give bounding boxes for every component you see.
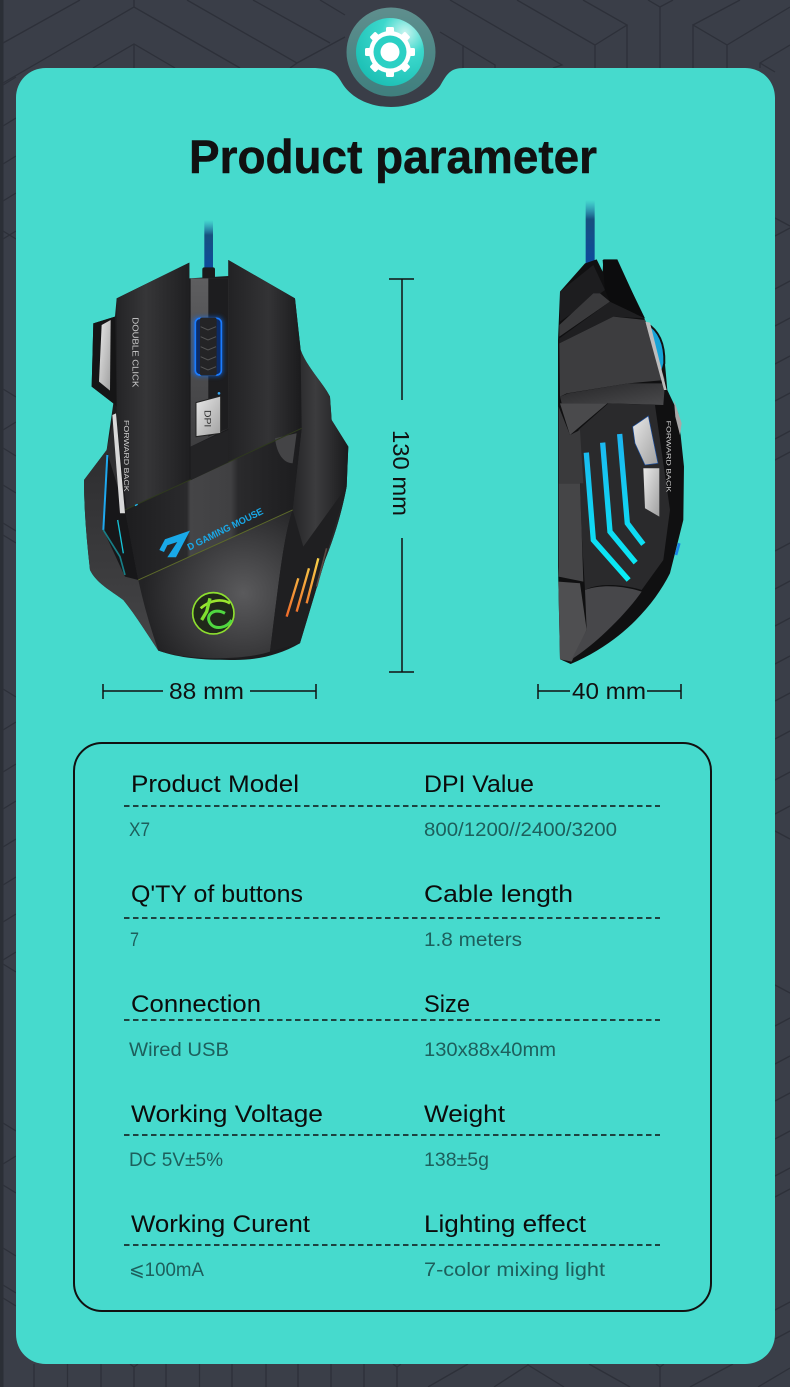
top shell [117, 263, 189, 510]
mouse body [84, 260, 348, 660]
spec: cable length: Cable length [424, 881, 573, 908]
spec: product model: Product Model [131, 771, 299, 798]
spec: cable length [424, 881, 573, 951]
spec: working voltage [129, 1101, 323, 1171]
spec: dpi value: 800/1200//2400/3200 [424, 819, 617, 841]
spec: working current [129, 1211, 310, 1281]
spec: size [424, 991, 556, 1061]
spec: dpi value [424, 771, 617, 841]
top side button [674, 400, 682, 435]
spec: weight: 138±5g [424, 1149, 489, 1171]
mouse cable [202, 220, 215, 279]
palm rest [138, 510, 293, 658]
dimension: depth 40 mm [538, 678, 681, 704]
diagonal band [125, 428, 302, 580]
spec: weight [424, 1101, 505, 1171]
rear light [676, 543, 679, 555]
lower right edge [270, 487, 347, 652]
left light strips [103, 455, 125, 575]
side buttons [112, 413, 129, 513]
side buttons: FORWARD BACK [122, 420, 129, 492]
spec: connection: Connection [131, 991, 261, 1018]
spec: lighting effect: 7-color mixing light [424, 1259, 606, 1281]
double click button [92, 317, 141, 407]
spec: buttons [130, 881, 303, 951]
spec: size: Size [424, 991, 470, 1018]
double click button: DOUBLE CLICK [131, 317, 141, 388]
spec: connection: Wired USB [129, 1039, 229, 1061]
spec: working current: Working Curent [131, 1211, 310, 1238]
spec: lighting effect [424, 1211, 606, 1281]
logo text [159, 506, 266, 557]
side buttons [633, 416, 659, 517]
spec: working current: ⩽100mA [129, 1259, 204, 1281]
dimension: width 88 mm [103, 678, 316, 704]
dimension: height 130 mm: 130 mm [388, 430, 414, 516]
dpi button [196, 392, 221, 437]
side cable [586, 200, 595, 264]
side label: FORWARD BACK [665, 421, 671, 492]
spec: product model: X7 [129, 819, 150, 841]
dimension: width 88 mm: 88 mm [169, 678, 244, 704]
dimension: height 130 mm [388, 279, 414, 672]
centre strip [191, 278, 228, 447]
spec: buttons: 7 [130, 929, 139, 951]
cyan light bars [586, 434, 643, 580]
left wing [84, 420, 158, 651]
dpi button: DPI [203, 410, 213, 427]
spec: working voltage: Working Voltage [131, 1101, 323, 1128]
icon: gear badge [346, 8, 436, 96]
spec: dpi value: DPI Value [424, 771, 534, 798]
spec: lighting effect: Lighting effect [424, 1211, 586, 1238]
right light strips [287, 558, 318, 617]
side view mouse [558, 200, 684, 664]
title: Product parameter [189, 130, 597, 183]
silver edge [645, 322, 667, 390]
side grip [578, 403, 670, 590]
spec: cable length: 1.8 meters [424, 929, 522, 951]
spec: buttons: Q'TY of buttons [131, 881, 303, 908]
dimension: depth 40 mm: 40 mm [572, 678, 646, 704]
specification table [74, 743, 711, 1311]
spec: connection [129, 991, 261, 1061]
dragon logo [193, 593, 234, 634]
spec: working voltage: DC 5V±5% [129, 1149, 223, 1171]
side body [558, 259, 684, 664]
front view mouse [84, 220, 348, 660]
right wing [283, 350, 348, 597]
spec: size: 130x88x40mm [424, 1039, 556, 1061]
spec: product model [129, 771, 299, 841]
logo text: D GAMING MOUSE [186, 506, 266, 553]
scroll bump [647, 323, 664, 373]
spec: weight: Weight [424, 1101, 505, 1128]
upper panels [559, 260, 665, 405]
scroll wheel [193, 317, 223, 377]
